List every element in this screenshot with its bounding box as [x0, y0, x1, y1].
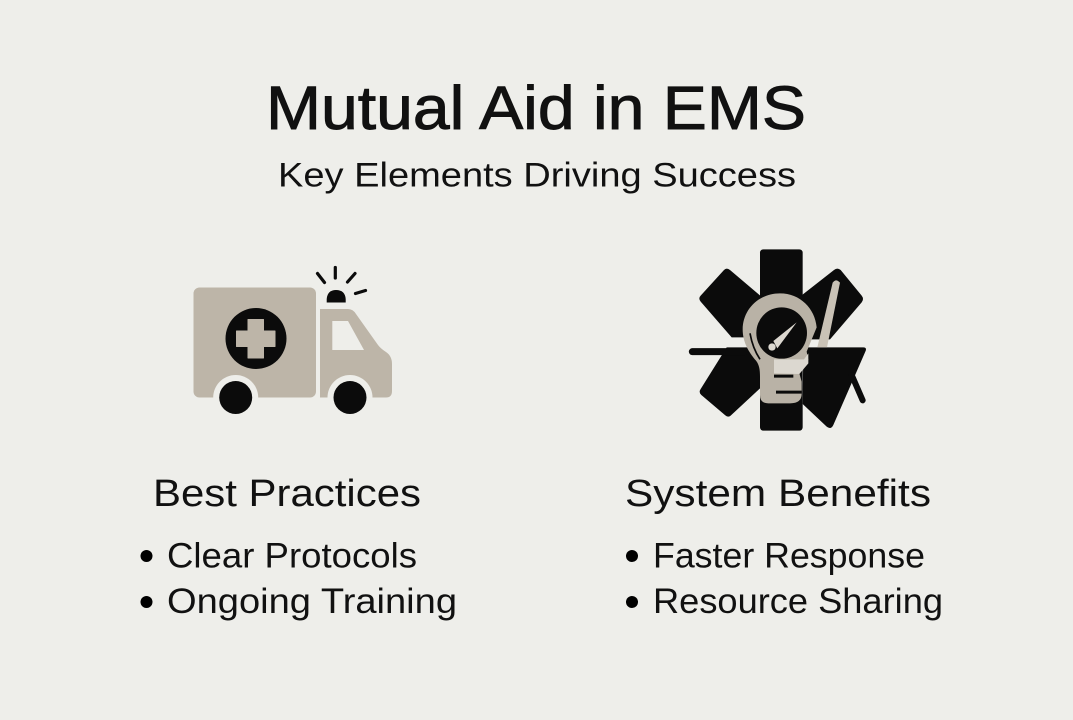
pen stroke [817, 280, 840, 347]
star of life arms [699, 249, 866, 431]
column: system benefits [625, 473, 943, 621]
icon: ambulance [194, 268, 392, 420]
siren light [318, 268, 366, 302]
column: best practices [140, 473, 457, 621]
list item: clear protocols: Clear Protocols [167, 536, 417, 576]
icon: star of life with lightbulb [692, 249, 866, 431]
subtitle: Key Elements Driving Success [278, 156, 796, 194]
title: Mutual Aid in EMS [266, 74, 806, 142]
rear wheel [328, 375, 372, 420]
cab window [332, 321, 364, 350]
heading: best practices: Best Practices [153, 473, 421, 515]
lightbulb [743, 293, 817, 403]
list item: ongoing training: Ongoing Training [167, 582, 457, 621]
list item: resource sharing: Resource Sharing [653, 582, 943, 621]
right diagonal line [852, 375, 863, 400]
ambulance rear box [194, 288, 316, 398]
ambulance cab [320, 309, 392, 398]
gauge needle [773, 322, 797, 348]
heading: system benefits: System Benefits [625, 473, 931, 515]
medical cross badge [226, 308, 286, 369]
left horizontal line [692, 341, 745, 362]
list item: faster response: Faster Response [653, 536, 925, 576]
front wheel [213, 375, 258, 420]
